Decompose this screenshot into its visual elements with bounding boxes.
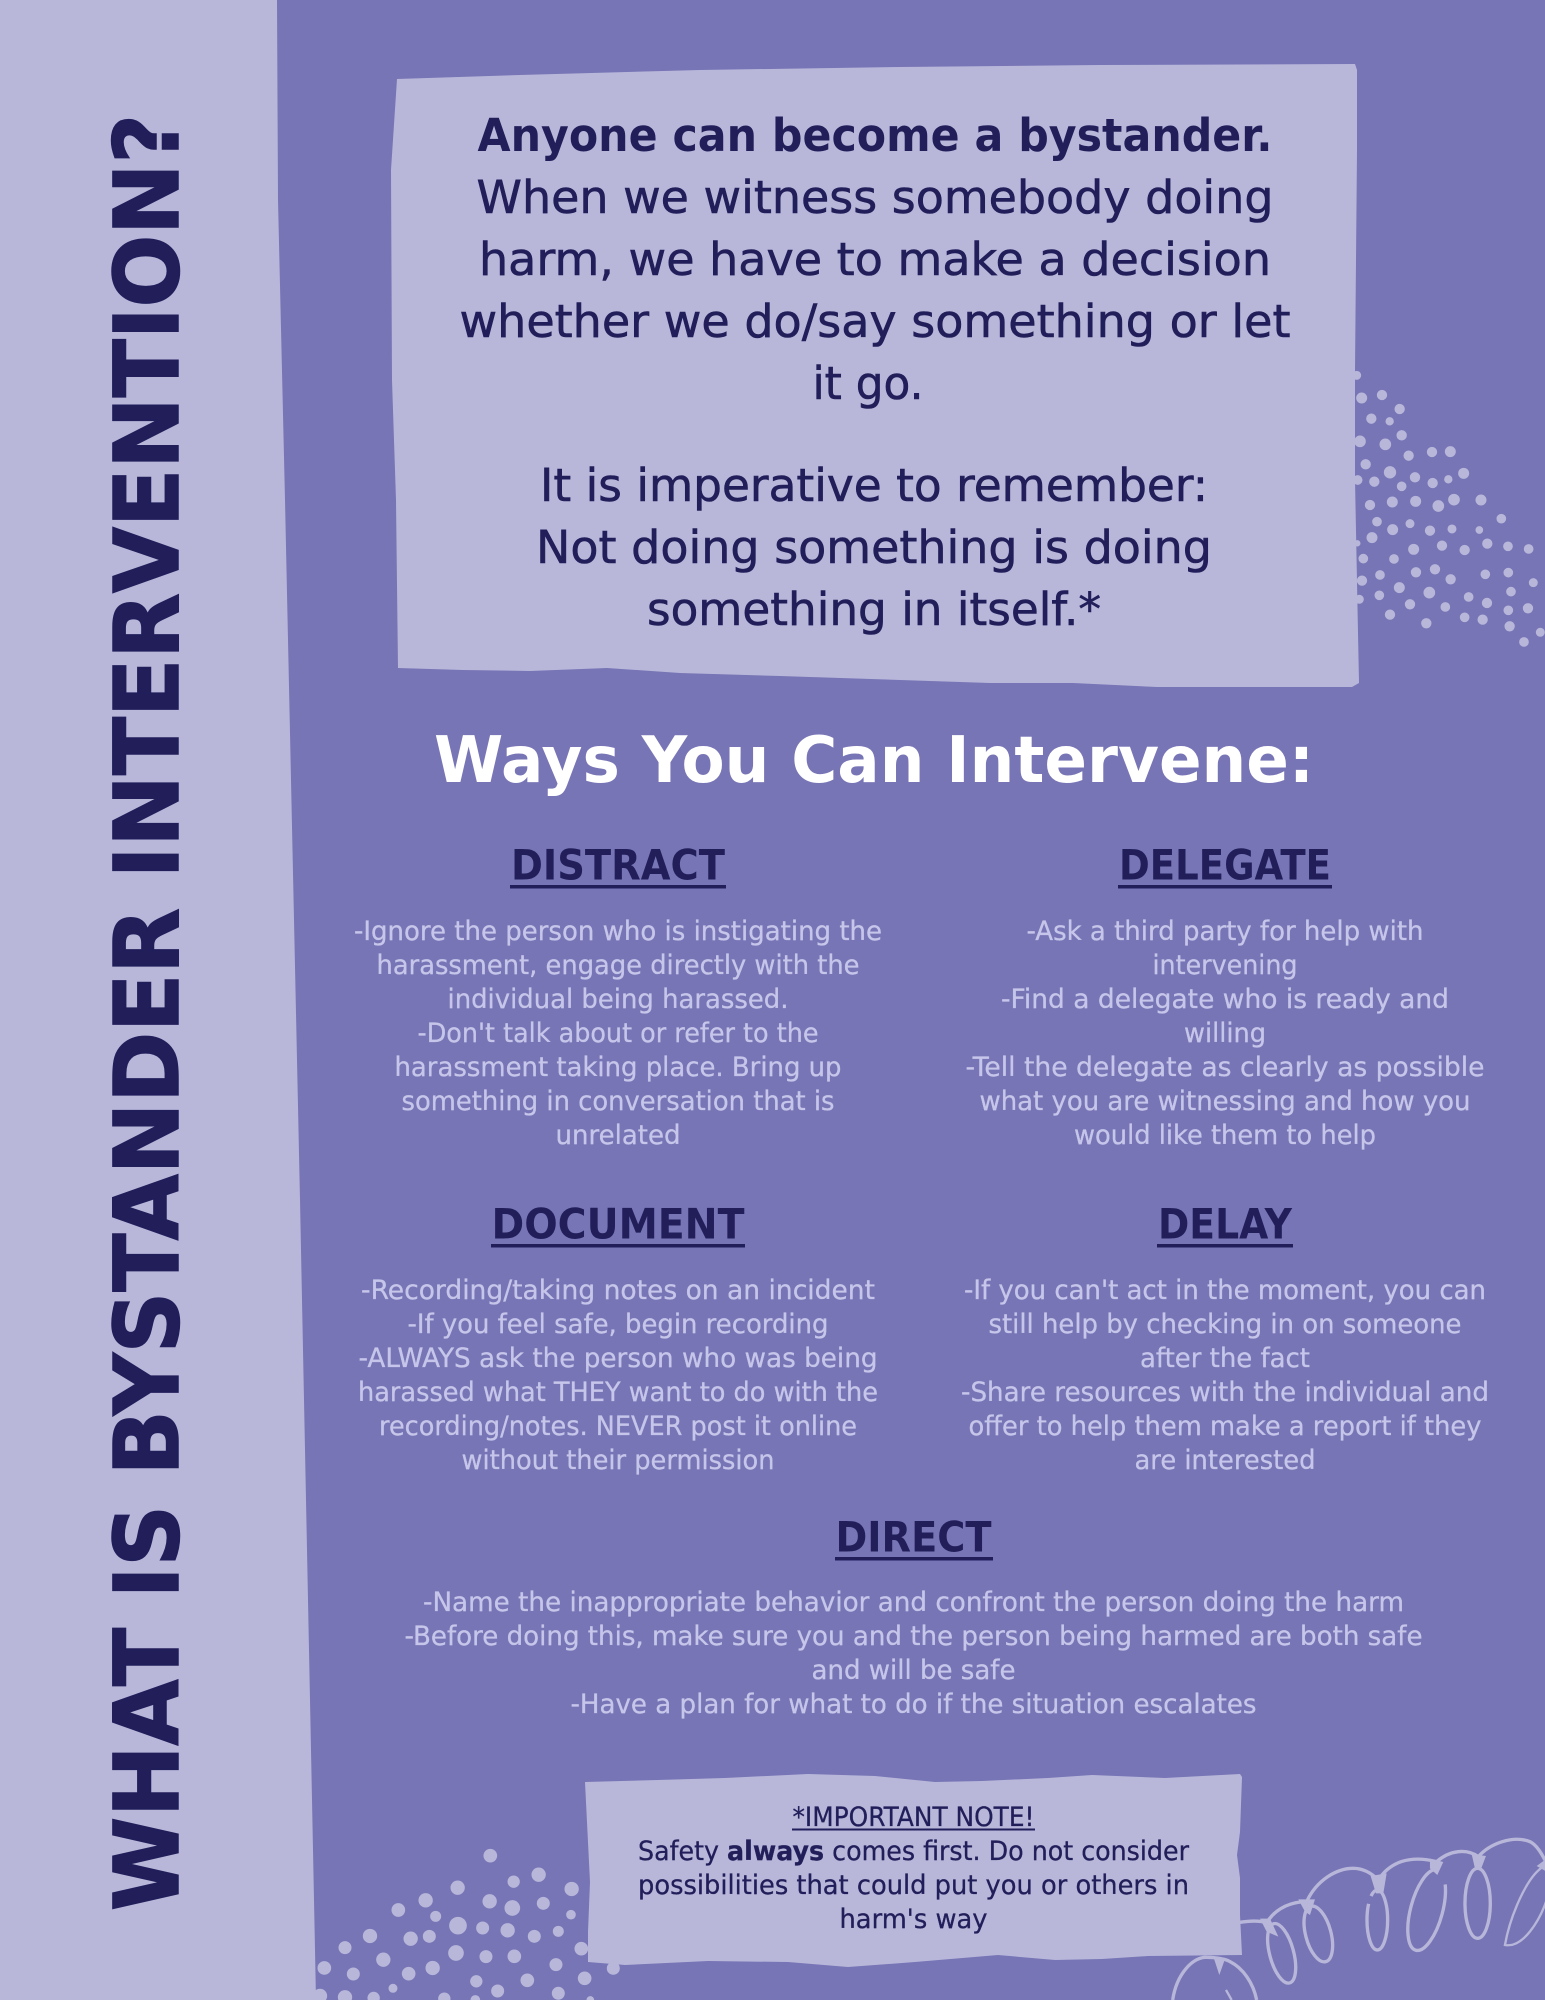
text: intro statement: whether we do/say something or let [460,295,1290,348]
text: imperative reminder: something in itself.* [647,583,1101,636]
section: delegate: what you are witnessing and how you [980,1086,1470,1117]
decorative spiral squiggle: lower right [1173,1839,1545,2000]
decorative dots: upper right [1353,371,1544,646]
section: delay: still help by checking in on someone [988,1309,1462,1340]
section: document: harassed what THEY want to do with the [358,1377,878,1408]
section: distract: -Don't talk about or refer to the [418,1018,818,1049]
text: intro statement: harm, we have to make a decision [479,233,1271,286]
section: delegate: intervening [1152,950,1298,981]
text: imperative reminder: It is imperative to remember: [540,459,1208,512]
section: distract: individual being harassed. [448,984,788,1015]
section: document: -Recording/taking notes on an incident [361,1275,875,1306]
section: delay: are interested [1134,1445,1316,1476]
section: distract: -Ignore the person who is instigating the [354,916,882,947]
note body text: Safety always comes first. Do not consider [638,1836,1190,1867]
text: intro statement: When we witness somebody doing [476,171,1274,224]
text: imperative reminder: Not doing something is doing [536,521,1212,574]
panel: intro box [391,64,1359,687]
heading: ways you can intervene: Ways You Can Intervene: [434,724,1314,798]
text: intro statement: Anyone can become a bystander. [478,109,1272,162]
section: delegate: -Ask a third party for help with [1026,916,1424,947]
section: delegate: -Tell the delegate as clearly as possible [966,1052,1484,1083]
decorative dots: lower left [313,1849,619,2000]
note body text: harm's way [840,1904,988,1935]
panel: important note [585,1774,1242,1967]
section: delegate: would like them to help [1074,1120,1376,1151]
section: distract: DISTRACT [511,840,725,890]
section: distract: something in conversation that is [402,1086,834,1117]
note body text [638,1836,1190,1935]
section: distract: harassment taking place. Bring up [394,1052,842,1083]
section: document: without their permission [462,1445,774,1476]
section: direct: -Name the inappropriate behavior and confront the person doing the harm [423,1587,1404,1618]
section: document: -If you feel safe, begin recording [408,1309,828,1340]
section: delegate [966,840,1484,1151]
section: delegate: -Find a delegate who is ready and [1001,984,1449,1015]
section: direct: -Before doing this, make sure you and the person being harmed are both safe [404,1621,1422,1652]
section: direct: -Have a plan for what to do if the situation escalates [570,1689,1256,1720]
title: what is bystander intervention: WHAT IS BYSTANDER INTERVENTION? [95,114,199,1911]
text: intro statement [460,109,1290,410]
section: delay: after the fact [1140,1343,1310,1374]
section: delay: offer to help them make a report if they [968,1411,1482,1442]
section: direct: DIRECT [836,1512,992,1562]
section: delegate: willing [1184,1018,1266,1049]
text: intro statement: it go. [812,357,924,410]
section: delay [961,1200,1489,1476]
section: distract: harassment, engage directly with the [376,950,860,981]
text: imperative reminder [536,459,1212,636]
section: direct: and will be safe [812,1655,1016,1686]
section: document: DOCUMENT [492,1200,745,1248]
section: delay: -Share resources with the individual and [961,1377,1489,1408]
note body text: possibilities that could put you or others in [638,1870,1189,1901]
panel: left vertical strip [0,0,316,2000]
section: document: recording/notes. NEVER post it online [379,1411,857,1442]
section: delay: -If you can't act in the moment, you can [964,1275,1486,1306]
section: distract [354,840,882,1151]
section: delay: DELAY [1158,1200,1293,1248]
section: distract: unrelated [556,1120,680,1151]
section: document [358,1200,878,1476]
note heading: *IMPORTANT NOTE! [792,1802,1034,1833]
section: delegate: DELEGATE [1119,840,1331,890]
section: direct [404,1512,1422,1720]
section: document: -ALWAYS ask the person who was being [358,1343,878,1374]
